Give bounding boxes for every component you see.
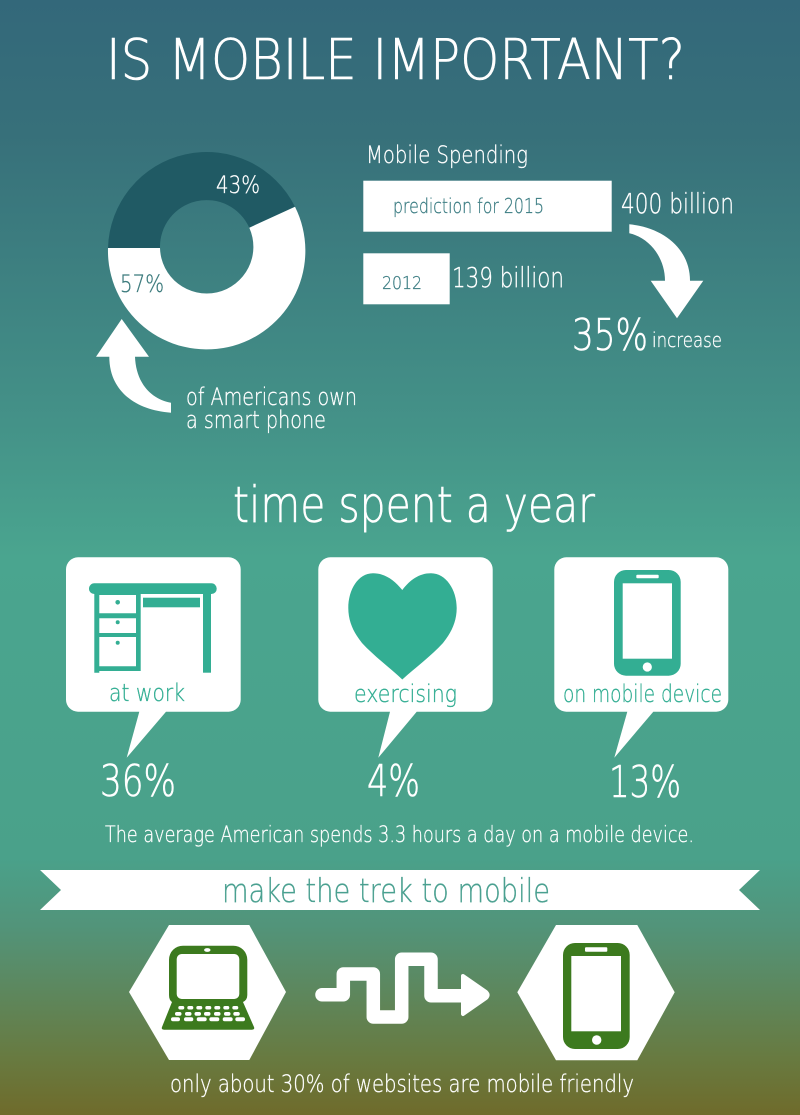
banner: make the trek to mobile: make the trek to mobile <box>222 871 550 910</box>
arrow: up to donut <box>96 319 171 413</box>
icon: laptop <box>162 946 254 1030</box>
hexagon: phone <box>517 925 675 1060</box>
stat: 4%: 4% <box>367 756 420 807</box>
caption: of Americans own a smart phone <box>186 383 357 434</box>
speech bubble <box>318 557 493 758</box>
bar: prediction for 2015 <box>363 181 612 232</box>
value: 139 billion: 139 billion <box>452 261 564 294</box>
arrow: winding path <box>322 959 488 1017</box>
hexagon: laptop <box>129 925 286 1060</box>
title: IS MOBILE IMPORTANT? <box>106 28 685 93</box>
caption: only about 30%: only about 30% of websites are mobile friendly <box>170 1070 634 1098</box>
value: 400 billion: 400 billion <box>621 187 734 220</box>
banner: make the trek to mobile <box>40 870 760 910</box>
panel: exercising <box>318 557 493 807</box>
speech bubble <box>554 557 728 758</box>
bar: 2012 <box>363 253 450 304</box>
heading: mobile spending: Mobile Spending <box>366 141 528 169</box>
label: 43%: 43% <box>216 171 260 199</box>
panel: smartphone ownership <box>96 152 357 434</box>
stat: 13%: 13% <box>609 757 681 808</box>
speech bubble <box>66 557 241 758</box>
label: 57%: 57% <box>120 270 164 298</box>
caption: of Americans own a smart phone: of Americans own <box>186 383 357 411</box>
icon: smartphone <box>563 943 630 1049</box>
label: increase: increase <box>652 328 722 352</box>
label: exercising: exercising <box>354 680 457 708</box>
stat: 35%: 35% <box>572 310 648 361</box>
arrow: down to increase <box>629 224 703 318</box>
bar: prediction for 2015: prediction for 2015 <box>393 194 544 218</box>
icon: desk <box>89 583 217 673</box>
panel: mobile spending <box>363 141 734 361</box>
caption: of Americans own a smart phone: a smart phone <box>186 406 326 434</box>
heading: time spent a year: time spent a year <box>233 476 595 534</box>
panel: on mobile device <box>554 557 728 808</box>
bar: 2012: 2012 <box>382 273 422 294</box>
label: at work: at work <box>109 679 185 707</box>
label: on mobile device: on mobile device <box>563 680 722 708</box>
panel: trek from laptop to phone <box>129 925 675 1060</box>
donut chart <box>108 152 305 349</box>
stat: 36%: 36% <box>100 756 176 807</box>
icon: smartphone <box>614 570 681 676</box>
panel: at work <box>66 557 241 807</box>
icon: heart <box>348 573 457 680</box>
